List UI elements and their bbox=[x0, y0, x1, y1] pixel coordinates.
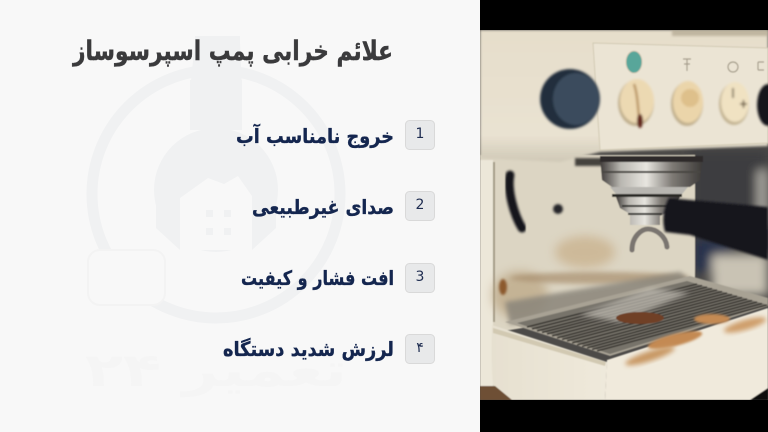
item text 3: افت فشار و کیفیت bbox=[241, 266, 394, 290]
icon: cream knobs bbox=[618, 79, 768, 128]
list item 1 bbox=[236, 120, 434, 150]
upper control panel bbox=[480, 30, 768, 162]
number badge 3 bbox=[406, 264, 434, 292]
item text 1: خروج نامناسب آب bbox=[236, 123, 394, 148]
photo: espresso machine bbox=[480, 0, 768, 432]
icon: blue knob bbox=[540, 69, 600, 129]
list item 2 bbox=[252, 192, 434, 220]
list item 3 bbox=[241, 264, 434, 292]
list item 4 bbox=[223, 334, 434, 364]
number badge 2: 2 bbox=[416, 197, 424, 213]
number badge 4 bbox=[406, 334, 434, 364]
background behind machine bbox=[690, 150, 768, 295]
watermark logo bbox=[85, 36, 347, 397]
item text 2: صدای غیرطبیعی bbox=[252, 195, 394, 219]
icon: teal button bbox=[626, 51, 642, 73]
portafilter handle bbox=[663, 198, 768, 260]
number badge 4: ۴ bbox=[416, 340, 424, 356]
number badge 1 bbox=[406, 120, 434, 150]
watermark logo: تعمیر ۲۴ bbox=[85, 343, 347, 397]
drip tray bbox=[492, 276, 768, 400]
title: علائم خرابی پمپ اسپرسوساز bbox=[71, 36, 393, 67]
spout bbox=[632, 229, 667, 250]
item text 4: لرزش شدید دستگاه bbox=[223, 337, 394, 361]
number badge 1: 1 bbox=[416, 126, 424, 142]
lower body bbox=[480, 155, 695, 390]
group head chrome bbox=[575, 156, 703, 225]
number badge 3: 3 bbox=[416, 269, 424, 285]
number badge 2 bbox=[406, 192, 434, 220]
panel: background bbox=[0, 0, 480, 432]
counter bbox=[480, 386, 512, 400]
panel marks bbox=[683, 59, 764, 72]
